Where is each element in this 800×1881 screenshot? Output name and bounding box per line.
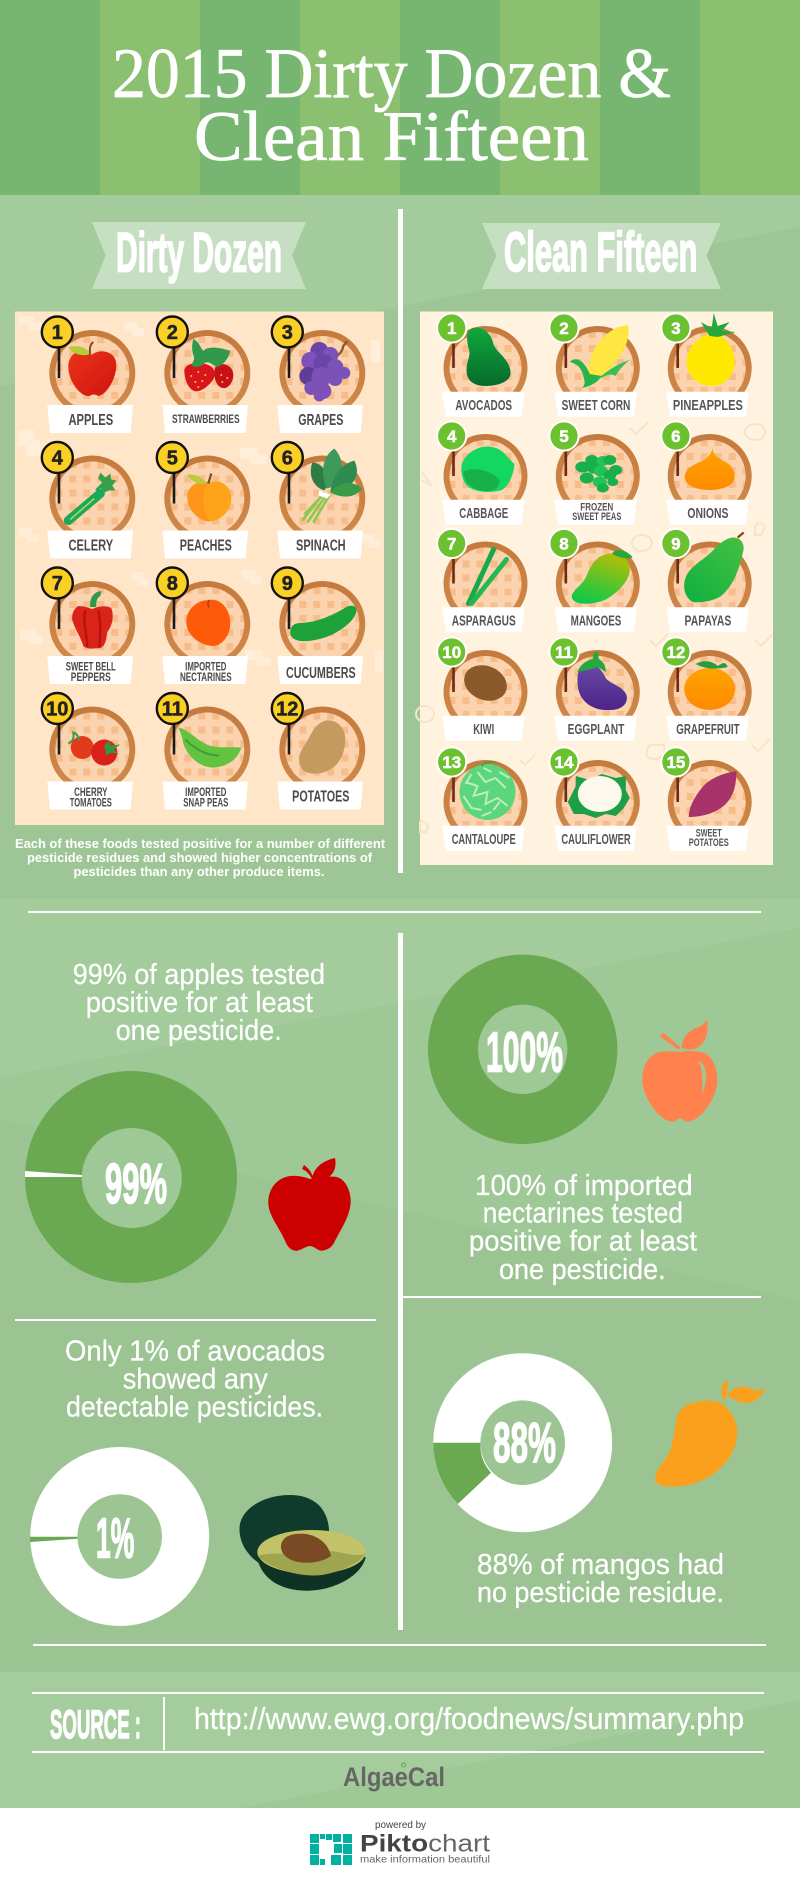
label: kiwi: KIWI [473,721,494,738]
stat text: nectarines: positive for at least [469,1226,697,1258]
icon: grapefruit [684,661,735,710]
label: cherry tomatoes: TOMATOES [70,796,112,810]
icon: peach [187,474,231,522]
stat text: nectarines [469,1170,697,1286]
donut chart: 99% [25,1071,237,1283]
food: cherry tomatoes [42,693,135,810]
title [112,35,671,176]
icon: celery [68,472,116,520]
food: asparagus [437,529,528,632]
food: pineapples [661,313,752,417]
label: eggplant: EGGPLANT [568,721,624,738]
label: potatoes: POTATOES [292,788,350,806]
icon: avocado halves [239,1495,366,1591]
label: asparagus: ASPARAGUS [452,612,516,630]
food: sweet bell peppers [42,568,135,684]
badge number 5: 5 [559,427,569,446]
food: potatoes [272,693,365,810]
label: imported snap peas: IMPORTED [185,785,227,799]
badge number 1: 1 [52,322,63,344]
label: apples: APPLES [68,412,113,429]
badge number 9: 9 [282,573,293,595]
badge number 8: 8 [559,534,569,554]
label: imported snap peas [183,785,228,810]
badge number 8: 8 [167,573,178,595]
label: sweet potatoes: SWEET [696,828,722,840]
stat text: nectarines: nectarines tested [483,1198,683,1230]
donut chart: 1%: 1% [96,1506,134,1570]
label: sweet corn: SWEET CORN [562,397,630,414]
food: papayas [661,529,752,632]
stat text: mangos: no pesticide residue. [477,1577,724,1609]
stat: 1% of avocados [30,1336,366,1626]
title: Clean Fifteen [194,98,589,176]
donut chart: 88% [433,1353,612,1532]
stat text: nectarines: one pesticide. [499,1254,666,1286]
stat: 100% of imported nectarines [428,955,717,1286]
food: celery [42,442,135,558]
stat text: mangos: 88% of mangos had [477,1549,724,1581]
banner: Dirty Dozen [92,220,306,289]
badge number 7: 7 [447,534,456,554]
food: strawberries [157,316,250,433]
badge number 12: 12 [276,698,298,720]
stat text: apples: 99% of apples tested [73,959,325,991]
icon: avocado [466,328,511,386]
label: pineapples: PINEAPPLES [673,397,743,414]
title band [0,0,800,195]
label: spinach: SPINACH [296,538,346,554]
label: imported snap peas: SNAP PEAS [183,796,228,810]
food: peaches [157,442,250,558]
food: imported snap peas [157,693,250,810]
label: imported nectarines [180,660,232,684]
food: cucumbers [272,568,365,684]
Piktochart wordmark: Pikto chart [360,1831,490,1858]
badge number 2: 2 [559,319,569,338]
powered by: powered by [375,1819,427,1831]
badge number 9: 9 [671,534,681,554]
icon: cabbage [461,446,514,492]
caption: dirty dozen note: pesticides than any other produce items. [74,864,324,879]
badge number 5: 5 [167,448,178,470]
caption: dirty dozen note: Each of these foods tested positive for a number of different [15,836,386,851]
label: cauliflower: CAULIFLOWER [561,831,631,848]
stat text: avocados: detectable pesticides. [66,1392,323,1424]
badge number 15: 15 [666,753,685,772]
label: sweet bell peppers: PEPPERS [71,670,111,684]
stat text: avocados [65,1336,325,1424]
panel: Dirty Dozen foods [15,312,384,825]
icon: potato [299,720,345,774]
donut chart: 100%: 100% [486,1021,563,1085]
icon: nectarine [186,600,230,646]
icon: cantaloupe [460,762,516,820]
food: onions [661,421,752,525]
badge number 3: 3 [282,322,293,344]
donut chart: 88%: 88% [493,1411,556,1475]
badge number 10: 10 [46,698,68,720]
source bar: SOURCE : [50,1703,141,1747]
icon: apple [68,342,116,396]
stat: 88% of mangos [433,1353,766,1609]
label: mangoes: MANGOES [571,612,621,630]
label: frozen sweet peas [572,502,621,523]
food: mangoes [549,529,640,632]
label: strawberries: STRAWBERRIES [172,412,240,426]
label: papayas: PAPAYAS [685,612,731,630]
icon: cauliflower [568,774,630,818]
icon: asparagus [468,550,506,604]
logo mark [310,1834,352,1865]
icon: peas [575,455,622,492]
badge number 6: 6 [671,427,681,446]
food: spinach [272,442,365,558]
food: cabbage [437,421,528,525]
title: 2015 Dirty Dozen & [112,35,671,113]
badge number 12: 12 [666,643,685,662]
badge number 7: 7 [52,573,63,595]
caption: dirty dozen note [15,836,386,879]
icon: mango [572,550,633,604]
food: sweet potatoes [661,747,752,851]
donut chart: 100% [428,955,617,1144]
badge number 1: 1 [447,319,456,338]
icon: strawberries [184,339,233,391]
stat text: avocados: showed any [123,1364,268,1396]
label: onions: ONIONS [687,505,728,522]
badge number 4: 4 [52,448,64,470]
stat text: mangos [477,1549,724,1609]
badge number 10: 10 [442,643,461,662]
badge number 11: 11 [162,698,183,720]
food: kiwi [437,637,528,741]
icon: sweet potato [689,771,737,817]
label: sweet potatoes: POTATOES [689,837,729,849]
donut chart: 1% [30,1447,209,1626]
label: sweet potatoes [689,828,729,849]
icon: papaya [684,532,744,602]
label: imported nectarines: NECTARINES [180,670,232,684]
label: cucumbers: CUCUMBERS [286,665,356,682]
food: grapefruit [661,637,752,741]
badge number 13: 13 [442,753,461,772]
donut chart: 99%: 99% [105,1152,167,1216]
icon: corn [570,325,630,388]
label: peaches: PEACHES [180,538,232,554]
source url: http://www.ewg.org/foodnews/summary.php [194,1701,744,1736]
label: cherry tomatoes [70,785,112,810]
icon: red apple [268,1158,351,1251]
stat text: apples: one pesticide. [116,1015,282,1047]
label: imported nectarines: IMPORTED [185,660,227,674]
label: grapefruit: GRAPEFRUIT [676,721,740,738]
icon: bell pepper [72,591,113,649]
stat text: apples: positive for at least [86,987,313,1019]
icon: grapes [299,341,350,402]
footer: Piktochart [310,1819,490,1866]
stat: 99% of apples [25,959,351,1283]
divider: top section [398,209,403,873]
banner: Clean Fifteen [482,220,721,289]
badge number 6: 6 [282,448,293,470]
label: frozen sweet peas: SWEET PEAS [572,511,621,523]
food: grapes [272,316,365,433]
badge number 11: 11 [555,643,573,662]
badge number 2: 2 [167,322,178,344]
icon: snap pea [178,728,241,768]
food: sweet corn [549,313,640,417]
stat text: apples [73,959,325,1047]
label: avocados: AVOCADOS [455,397,512,414]
food: eggplant [549,637,640,741]
icon: cucumber [290,606,356,641]
stat text: nectarines: 100% of imported [475,1170,693,1202]
label: sweet bell peppers: SWEET BELL [66,660,116,674]
icon: kiwi [459,659,512,707]
badge number 14: 14 [555,753,574,772]
banner: Dirty Dozen: Dirty Dozen [116,220,282,284]
icon: pineapple [687,313,736,386]
tagline: make information beautiful [360,1854,490,1866]
icon: orange apple [642,1019,717,1122]
label: cherry tomatoes: CHERRY [74,785,107,799]
label: grapes: GRAPES [298,412,344,429]
panel: Clean Fifteen foods [416,312,773,865]
food: apples [42,316,135,433]
badge number 3: 3 [671,319,681,338]
icon: onion [685,447,735,490]
icon: mango [655,1380,766,1487]
food: frozen sweet peas [549,421,640,525]
icon: spinach [302,448,362,522]
stat text: avocados: Only 1% of avocados [65,1336,325,1368]
label: frozen sweet peas: FROZEN [580,502,613,514]
food: cantaloupe [437,747,528,851]
source bar [32,1692,764,1753]
caption: dirty dozen note: pesticide residues and showed higher concentrations of [27,850,373,865]
label: cabbage: CABBAGE [459,505,508,522]
label: cantaloupe: CANTALOUPE [452,831,516,848]
label: celery: CELERY [68,538,113,554]
icon: eggplant [577,652,627,710]
dividers: stats section [15,911,766,1646]
icon: cherry tomatoes [68,732,120,766]
food: cauliflower [549,747,640,851]
label: sweet bell peppers [66,660,116,684]
logo: AlgaeCal: AlgaeCal [343,1762,445,1792]
food: imported nectarines [157,568,250,684]
badge number 4: 4 [447,427,457,446]
food: avocados [437,313,528,417]
